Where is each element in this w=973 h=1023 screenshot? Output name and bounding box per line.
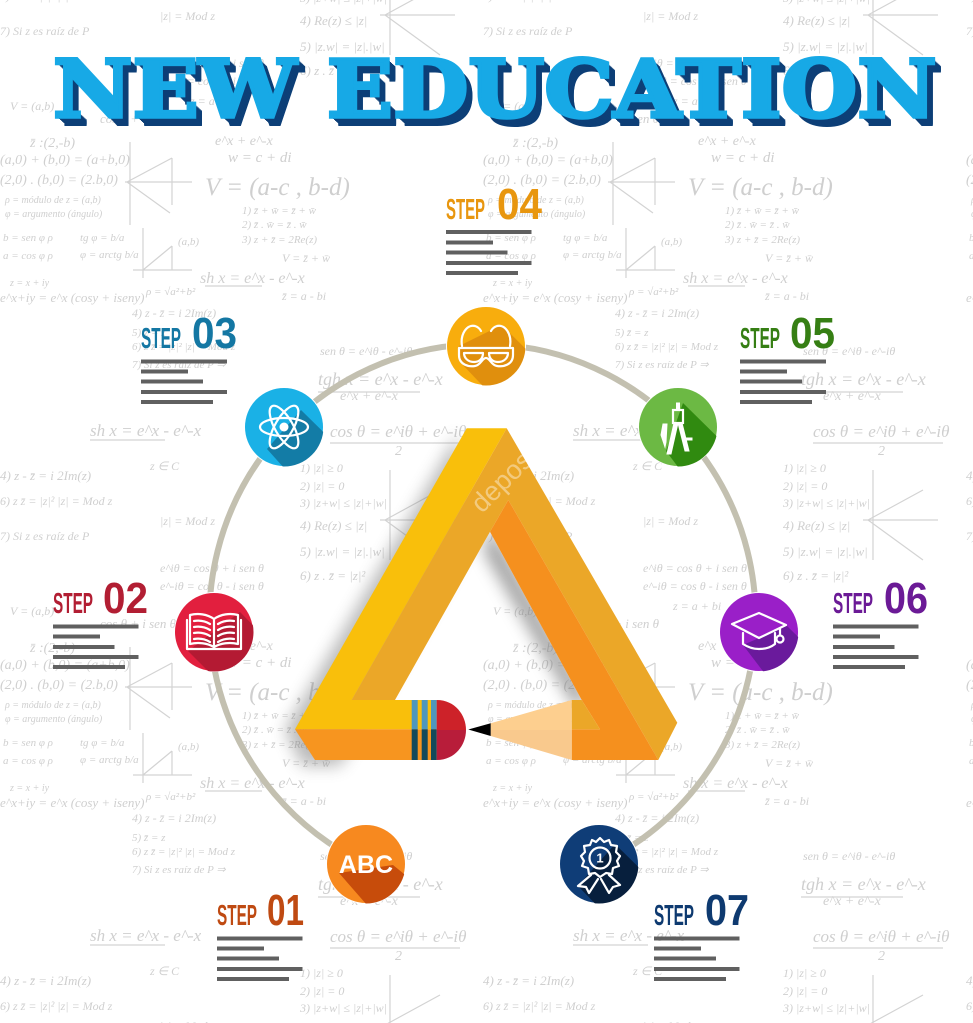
eraser: [437, 700, 466, 760]
step 6 label: 06: [884, 574, 928, 623]
watermark: depositphotos: [465, 378, 605, 518]
step 7 label: STEP: [654, 900, 694, 932]
step 2 label: 02: [103, 574, 148, 623]
yellow face: [295, 428, 507, 729]
step 4 label: [446, 180, 542, 275]
step 1 label: STEP: [217, 900, 257, 932]
ring connecting the steps: [209, 344, 756, 864]
icon: step 7 award ribbon: [560, 825, 638, 904]
title: NEW EDUCATION: [53, 42, 937, 136]
step 6 label: [833, 574, 928, 669]
inner light orange corner: [572, 700, 600, 729]
step 3 label: 03: [192, 309, 237, 358]
step 6 label: STEP: [833, 588, 873, 620]
step 2 label: [53, 574, 148, 669]
triangle drop shadows: [285, 434, 590, 766]
step 1 label: 01: [267, 886, 304, 935]
pencil tip: [468, 700, 572, 760]
impossible triangle pencil: [285, 378, 677, 766]
step 4 label: 04: [497, 180, 542, 229]
step 4 label: STEP: [446, 194, 485, 226]
step 3 label: STEP: [141, 323, 181, 355]
icon: step 3 atom: [245, 388, 324, 466]
icon: step 1 ABC: [326, 825, 406, 904]
step 3 label: [141, 309, 237, 404]
step 1 label: [217, 886, 304, 981]
step 5 label: 05: [790, 309, 835, 358]
dark orange face: [490, 500, 658, 760]
ferrule bands: [412, 700, 437, 760]
icon: step 7 award ribbon: 1: [596, 850, 604, 866]
light orange face: [352, 428, 677, 760]
icon: step 5 compass: [638, 388, 717, 466]
icon: step 4 goggles: [446, 307, 526, 386]
icon: step 2 open book: [174, 592, 254, 672]
step 5 label: STEP: [740, 323, 780, 355]
step 7 label: 07: [705, 886, 749, 935]
bottom orange face: [295, 729, 437, 760]
step 2 label: STEP: [53, 588, 93, 620]
step 7 label: [654, 886, 749, 981]
icon: step 6 graduation cap: [720, 592, 798, 672]
step 5 label: [740, 309, 835, 404]
icon: step 1 ABC: ABC: [339, 851, 393, 879]
